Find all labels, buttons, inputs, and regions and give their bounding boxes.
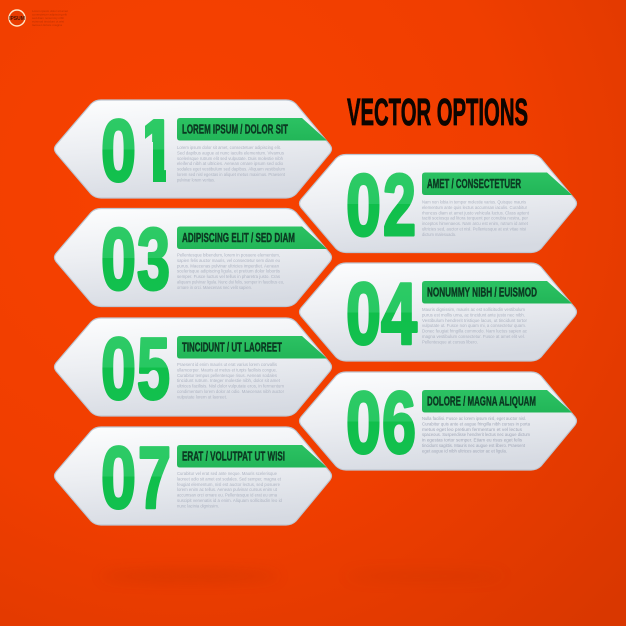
panel: 06	[300, 372, 576, 472]
body text: eget augue id nibh ultrices auctor ac et ligula.	[422, 448, 507, 453]
body text: in egestas tortor semper. Etiam eu risus eget felis	[422, 438, 523, 443]
body text: tincidunt rutrum. Integer molestie nibh, dolor sit amet	[177, 378, 281, 383]
panel: 05	[54, 318, 332, 418]
body text: vulputate lorem ut laoreet.	[177, 394, 227, 399]
body text: accumsan orci ornare eu. Pellentesque id erat eu urna	[177, 493, 277, 498]
number 02	[346, 157, 416, 254]
body text: Nulla facilisi. Fusce ac lorem ipsum nisl, eget auctor nisl.	[422, 416, 526, 421]
body text: tincidunt sagittis. Mauris nec augue est libero. Praesent	[422, 443, 526, 448]
body text	[177, 252, 284, 290]
number 06: 6	[382, 374, 416, 472]
body text: dictum malesuada.	[422, 232, 456, 237]
body text: feugiat elementum, nisl est auctor lectus, sed posuere	[177, 482, 280, 487]
body text: vulputate ut. Fusce non quam mi, a consectetur quam.	[422, 323, 526, 328]
number 07: 7	[138, 430, 171, 526]
number 07	[101, 430, 171, 526]
panel: 02	[300, 154, 576, 254]
body text: scelerisque rutrum elit sed vulputate. Duis molestie nibh	[177, 156, 283, 161]
band heading: ERAT / VOLUTPAT UT WISI	[182, 450, 285, 464]
number 04: 4	[381, 266, 417, 362]
small header text: euismod tincidunt ut wisi	[32, 20, 64, 24]
small header text	[32, 9, 68, 27]
band heading: AMET / CONSECTETUER	[427, 177, 521, 191]
body text: ullamcorper. Mauris at metus et turpis facilisis congue.	[177, 367, 277, 372]
green label band	[177, 445, 327, 468]
body text: laoreet odio sit amet est sodales. Sed semper, magna et	[177, 476, 282, 481]
body text: suscipit venenatis id a enim. Aliquam sollicitudin leo id	[177, 498, 282, 503]
body text: pulvinar lorem veritas.	[177, 177, 215, 182]
number 05: 0	[101, 320, 136, 418]
body text: ornare in orci. Maecenas nec velit sapien.	[177, 285, 252, 290]
small header text: sed diam nonummy nibh	[32, 16, 64, 20]
band heading: ADIPISCING ELIT / SED DIAM	[182, 231, 295, 245]
green label band	[177, 226, 327, 249]
body text: spaceous. Suspendisse hendrerit lectus nec augue dictum	[422, 432, 530, 437]
body text: purus. Maecenas pulvinar ultricies imperdiet. Aenean	[177, 263, 279, 268]
logo badge: IPSUM	[9, 16, 25, 22]
number 01: 1	[137, 102, 176, 200]
body text: elementum ante quis lectus accumsan iaculis. Curabitur	[422, 205, 527, 210]
body text: Curabitur quis ante et augue fringilla nibh cursus in porta	[422, 421, 530, 426]
body text: Sed dapibus augue at nunc iaculis elementum. Vivamus	[177, 150, 285, 155]
number 04	[346, 266, 417, 362]
band heading: LOREM IPSUM / DOLOR SIT	[182, 122, 288, 136]
green label band	[177, 336, 327, 358]
body text: Lorem ipsum dolor sit amet, consectetuer adipiscing elit.	[177, 145, 281, 150]
body text: metus eget leo pretium fermentum et vel lectus	[422, 427, 523, 432]
body text: semper. Fusce luctus vel tellus in pharetra justo. Cras	[177, 274, 281, 279]
number 04: 0	[346, 266, 381, 362]
body text: Curabitur tempus pellentesque risus. Aenean sodales	[177, 373, 278, 378]
body text: purus est mollis urna, ac tincidunt ante justo nec nibh.	[422, 312, 525, 317]
green label band	[422, 390, 572, 412]
body text: nunc lacinia dignissim.	[177, 503, 219, 508]
small header text: consectetuer adipiscing elit	[32, 12, 67, 16]
body text: Vestibulum hendrerit tristique lacus, ut tincidunt tortor	[422, 318, 527, 323]
body text: Pellentesque bibendum, lorem in posuere elementum,	[177, 252, 280, 258]
body text: ultrices facilisis. Nisl dolor vulputate eros, in fermentum	[177, 384, 284, 389]
band heading: DOLORE / MAGNA ALIQUAM	[427, 394, 536, 408]
body text: lorem sed nisl egestas in aliquet metus maximus. Praesent	[177, 172, 286, 177]
body text: condimentum lorem dolor at odio. Maecenas nibh auctor	[177, 389, 284, 394]
body text	[422, 307, 528, 344]
green label band	[422, 172, 572, 195]
number 03: 3	[137, 211, 170, 308]
number 05: 5	[137, 320, 170, 418]
body text: Curabitur vel erat sed ante neque. Mauris scelerisque	[177, 471, 277, 476]
body text: sapien felis auctor mauris, vel consectetur sem diam eu	[177, 258, 280, 263]
band heading: TINCIDUNT / UT LAOREET	[182, 340, 282, 354]
green label band	[177, 118, 327, 140]
body text: aliquam pulvinar ligula. Nunc dui felis, semper in faucibus eu,	[177, 280, 284, 284]
body text: Pellentesque at cursus libero.	[422, 339, 478, 344]
number 01	[102, 118, 166, 183]
number 07: 0	[101, 430, 136, 526]
body text: Praesent id enim mauris ut erat varius lorem convallis	[177, 362, 278, 367]
body text: sodales eget vestibulum sed dapibus. Aliquam vestibulum	[177, 167, 285, 172]
body text: Mauris dignissim, mauris ac est sollicitudin vestibulum	[422, 307, 525, 312]
number 03: 0	[101, 211, 136, 308]
number 02: 0	[346, 157, 381, 254]
body text: taciti sociosqu ad litora torquent per conubia nostra, per	[422, 216, 528, 221]
body text: lorem enim ac tellus. Aenean pulvinar cursus enim ut	[177, 487, 278, 492]
logo badge	[9, 10, 25, 26]
panel: 01	[54, 100, 332, 200]
band heading: NONUMMY NIBH / EUISMOD	[427, 286, 537, 300]
body text	[177, 471, 282, 508]
body text: ultricies sed, auctor et nisl. Pellentesque at est vitae nisi	[422, 226, 526, 232]
body text: eleifend nibh at ultricies. Aenean ornare ipsum sed odio	[177, 161, 283, 166]
panel: 04	[300, 263, 576, 362]
small header text: Lorem ipsum dolor sit amet	[32, 9, 68, 13]
body text: scelerisque adipiscing ligula, et pretium dolor lobortis	[177, 269, 281, 274]
number 06	[346, 374, 416, 472]
body text: inceptos himenaeos. Nam arcu est enim, rutrum id amet	[422, 221, 529, 226]
panel: 03	[54, 208, 332, 308]
number 06: 0	[346, 374, 381, 472]
number 01: 0	[101, 102, 136, 200]
body text	[177, 362, 284, 399]
body text: rhoncus diam et amet justo vehicula luctus. Class aptent	[422, 210, 530, 215]
floor shadows	[100, 571, 505, 581]
body text	[177, 145, 286, 182]
body text: magna vestibulum consectetur. Fusce at amet elit vel.	[422, 334, 525, 339]
panel: 07	[54, 427, 332, 526]
body text	[422, 200, 530, 237]
small header text: laoreet dolore magna	[32, 23, 62, 27]
green label band	[422, 281, 572, 304]
body text: Donec feugiat fringilla commodo. Nam luctus sapien ac	[422, 329, 528, 334]
body text: Nam non lobia in tempor molestie varius. Quisque mauris	[422, 200, 527, 204]
body text	[422, 416, 530, 453]
number 02: 2	[383, 157, 416, 254]
